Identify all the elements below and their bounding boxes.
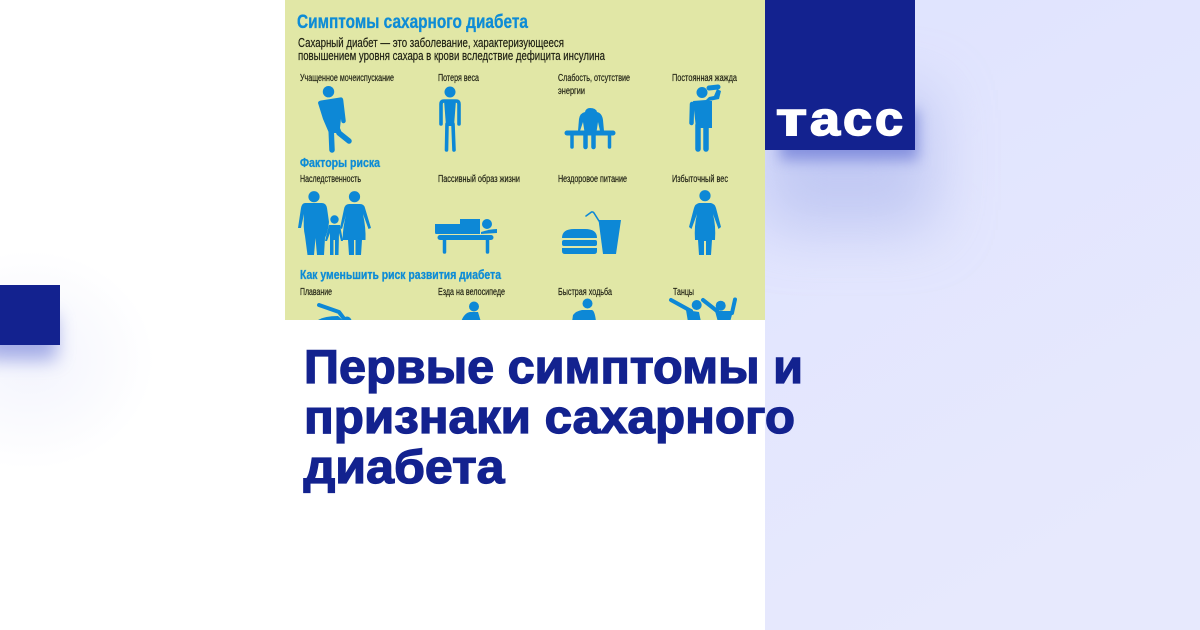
heading: symptoms: Симптомы сахарного диабета bbox=[297, 12, 528, 33]
label: swimming: Плавание bbox=[300, 287, 332, 298]
label: brisk walking: Быстрая ходьба bbox=[558, 286, 612, 298]
logo wordmark: с bbox=[875, 92, 903, 145]
icon: drinking figure bbox=[692, 87, 721, 149]
icon: walker (cropped) bbox=[572, 298, 596, 322]
intro text: повышением уровня сахара в крови вследствие дефицита инсулина bbox=[298, 48, 606, 63]
logo wordmark bbox=[776, 92, 903, 145]
infographic image: symptoms of diabetes bbox=[285, 0, 765, 326]
heading: how to reduce risk: Как уменьшить риск развития диабета bbox=[300, 268, 502, 282]
title: Первые симптомы и bbox=[304, 340, 803, 393]
label: dancing: Танцы bbox=[673, 287, 694, 298]
intro text bbox=[298, 35, 606, 63]
icon: thin figure bbox=[441, 86, 459, 150]
label: weakness: Слабость, отсутствие bbox=[558, 72, 630, 84]
icon: swimmer (cropped) bbox=[316, 303, 352, 320]
icon: dancers (cropped) bbox=[671, 300, 735, 322]
label: constant thirst: Постоянная жажда bbox=[672, 73, 737, 84]
label: heredity: Наследственность bbox=[300, 174, 361, 185]
title: диабета bbox=[304, 440, 505, 493]
label: frequent urination: Учащенное мочеиспускание bbox=[300, 73, 394, 84]
logo wordmark: с bbox=[843, 92, 872, 145]
logo wordmark: т bbox=[776, 92, 807, 145]
icon: person lying on bench bbox=[435, 219, 497, 252]
label: unhealthy diet: Нездоровое питание bbox=[558, 174, 627, 185]
logo wordmark: а bbox=[810, 92, 841, 145]
panel: lavender background bbox=[765, 0, 1200, 630]
heading: risk factors: Факторы риска bbox=[300, 156, 381, 170]
icon: tired figure on bench bbox=[567, 108, 613, 147]
icon: overweight family bbox=[298, 191, 371, 255]
icon: burger and drink bbox=[562, 212, 621, 254]
icon: cyclist (cropped) bbox=[462, 302, 480, 320]
logo block: TASS bbox=[765, 0, 915, 150]
logo shadow bbox=[760, 90, 935, 230]
icon: urination figure bbox=[318, 86, 349, 150]
title: признаки сахарного bbox=[304, 390, 795, 443]
label: weakness: энергии bbox=[558, 86, 585, 97]
icon: overweight woman bbox=[689, 190, 721, 255]
label: weight loss: Потеря веса bbox=[438, 73, 479, 84]
label: excess weight: Избыточный вес bbox=[672, 173, 728, 185]
title bbox=[304, 340, 803, 493]
label: cycling: Езда на велосипеде bbox=[438, 287, 505, 298]
decorative square bbox=[0, 285, 60, 345]
background glow on the left bbox=[0, 250, 155, 470]
label: sedentary lifestyle: Пассивный образ жизни bbox=[438, 173, 520, 185]
square shadow bbox=[0, 315, 57, 360]
intro text: Сахарный диабет — это заболевание, характеризующееся bbox=[298, 35, 564, 50]
label: weakness bbox=[558, 72, 630, 97]
